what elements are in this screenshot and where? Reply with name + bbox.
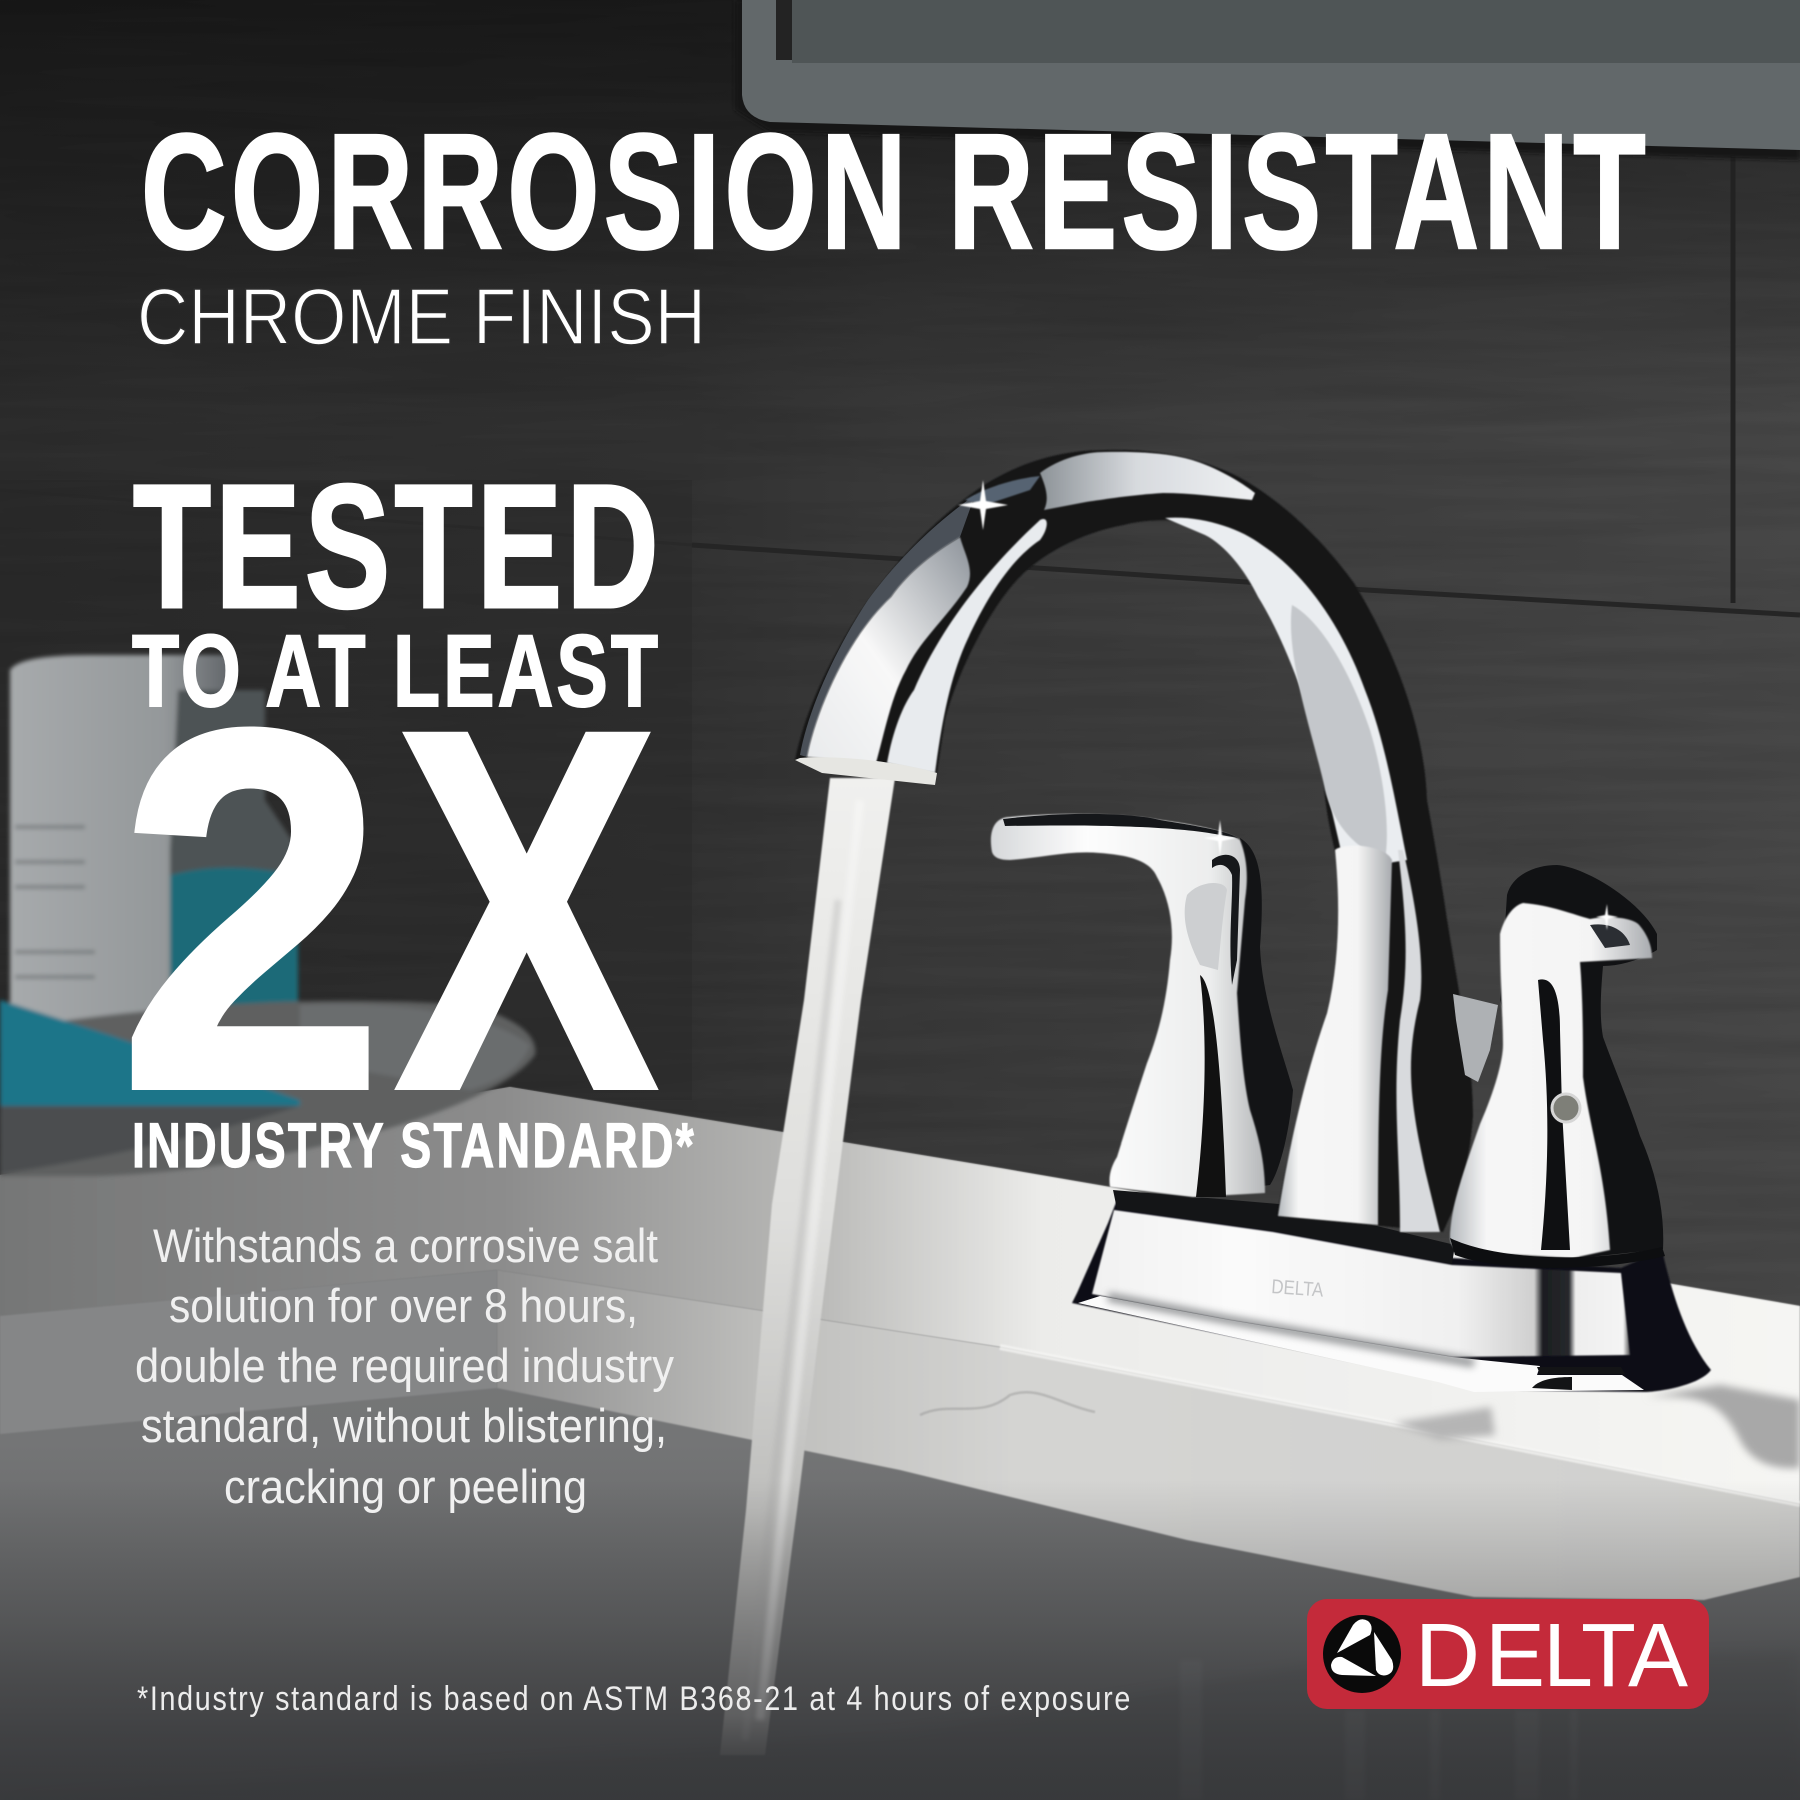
- counter front edge right: [497, 1270, 1800, 1600]
- basin shadow wedge: [0, 1650, 1800, 1800]
- description text block: Withstands a corrosive salt: [153, 1219, 658, 1272]
- marble veining: [920, 1392, 1095, 1415]
- icon: delta triangle mark: [1323, 1615, 1401, 1693]
- counter top surface: [0, 1087, 1800, 1504]
- spout edge tone: [800, 495, 975, 757]
- arch inner silver: [1165, 518, 1407, 870]
- spout tip ring: [795, 757, 937, 785]
- spout outer highlight: [807, 537, 970, 763]
- plate: [0, 1001, 535, 1176]
- counter edge highlight: [1000, 1347, 1800, 1504]
- faucet shadows on counter: [1646, 1385, 1800, 1468]
- plate bright panel: [1092, 1210, 1630, 1357]
- reflections below logo: [1180, 1660, 1578, 1800]
- chrome body dark base: [795, 450, 1473, 1232]
- description text block: [135, 1219, 674, 1513]
- Delta logo: [1307, 1599, 1709, 1709]
- plate dark outline: [1072, 1200, 1711, 1392]
- lower stem highlight: [1278, 846, 1392, 1225]
- water stream: [720, 778, 895, 1755]
- handle set screw: [1552, 1094, 1580, 1122]
- faucet: [795, 450, 1711, 1392]
- blurred toiletries at left: [0, 655, 535, 1176]
- sparkles: [958, 480, 1618, 930]
- subtitle: chrome finish: CHROME FINISH: [137, 272, 706, 361]
- DELTA mark on plate: DELTA: [1271, 1276, 1325, 1302]
- faucet base plate: [1072, 1200, 1711, 1392]
- mirror frame at top: [735, 0, 1800, 160]
- footnote: *Industry standard is based on ASTM B368-21 at 4 hours of exposure: [137, 1680, 1132, 1718]
- bottle: [170, 690, 292, 1040]
- claim: industry standard: INDUSTRY STANDARD*: [132, 1111, 696, 1181]
- background: tiled wall: [0, 0, 1800, 1350]
- claim: tested: TESTED: [133, 449, 663, 645]
- counter and sink: [0, 1087, 1800, 1800]
- claim: to at least: TO AT LEAST: [132, 614, 661, 728]
- blue reflection at bend: [965, 476, 1040, 505]
- left handle: [991, 814, 1265, 1197]
- central chrome panel: [1291, 605, 1387, 860]
- plate contact shadow: [1108, 1297, 1474, 1363]
- counter front edge left: [0, 1270, 497, 1434]
- description text block: solution for over 8 hours,: [169, 1279, 638, 1332]
- dark cap and shadow: [1500, 865, 1663, 1258]
- left handle shadow side: [1230, 838, 1293, 1190]
- stem right strip: [1396, 850, 1440, 1232]
- right handle: [1450, 865, 1665, 1268]
- claim: 2X: [118, 623, 660, 1196]
- small lift rod: [1453, 994, 1498, 1082]
- wordmark: DELTA: [1415, 1606, 1688, 1706]
- plate lower lip: [1078, 1296, 1644, 1392]
- description text block: double the required industry: [135, 1339, 674, 1392]
- claim: 2X: 2: [118, 623, 385, 1196]
- soft vignette at bottom: [0, 1480, 1800, 1800]
- jar: [10, 655, 230, 1030]
- spout arch and stem: [795, 450, 1473, 1232]
- spout inner highlight: [887, 519, 1047, 773]
- foot reflections: [1537, 1367, 1625, 1374]
- claim: 2X: X: [395, 623, 660, 1196]
- sink and cabinet below the counter: [0, 1087, 1800, 1800]
- description text block: cracking or peeling: [224, 1460, 587, 1513]
- handle body: [1450, 903, 1652, 1258]
- description text block: standard, without blistering,: [141, 1399, 667, 1452]
- dark band between handles and plate: [1113, 1190, 1455, 1264]
- spout top dome: [1040, 452, 1255, 510]
